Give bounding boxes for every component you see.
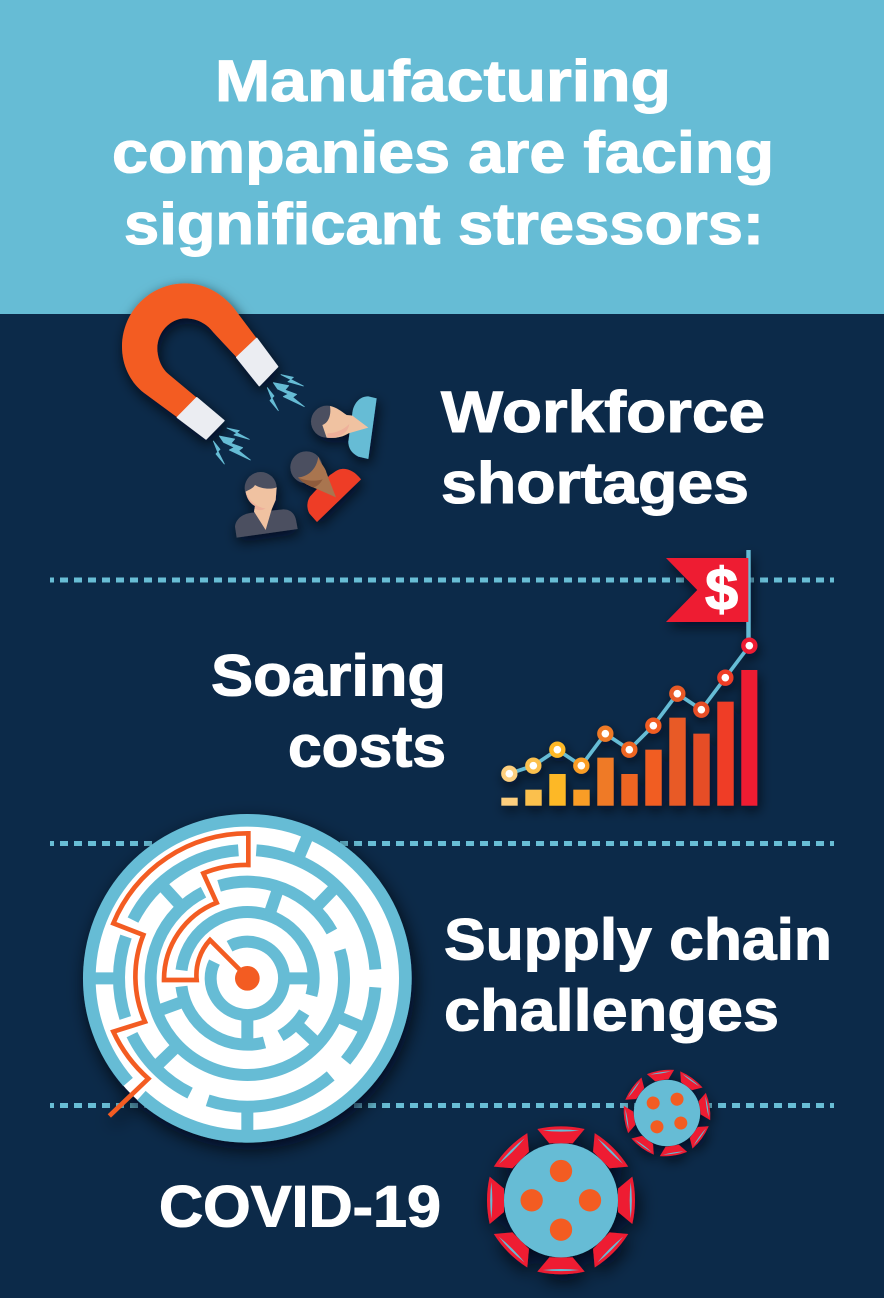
icon: rising cost chart with dollar flag: [501, 550, 757, 806]
maze centre dot: [235, 966, 260, 991]
small virus dots: [634, 1080, 700, 1146]
worker: red shirt: [290, 451, 361, 522]
dotted divider 2: [50, 841, 834, 846]
dollar flag: $: [705, 555, 738, 622]
title: [112, 49, 774, 257]
trend line: [509, 646, 749, 774]
maze disc: [83, 814, 411, 1142]
flag pole: [746, 550, 751, 647]
magnet: [122, 283, 278, 439]
label: workforce shortages: [441, 380, 765, 516]
label: workforce shortages: shortages: [441, 451, 749, 516]
title: Manufacturing: [215, 49, 671, 114]
icon: magnet attracting workers: [122, 283, 377, 538]
lightning bolts upper: [267, 375, 304, 411]
icon: small virus: [607, 1053, 727, 1173]
title: significant stressors:: [124, 192, 764, 257]
title: companies are facing: [112, 120, 774, 186]
header band: [0, 0, 884, 314]
virus spikes: [487, 1126, 635, 1274]
dotted divider 3: [50, 1103, 834, 1108]
worker: grey shirt: [235, 472, 298, 538]
label: workforce shortages: Workforce: [441, 380, 765, 445]
small virus body: [621, 1067, 713, 1159]
label: soaring costs: costs: [288, 714, 446, 780]
icon: large virus: [487, 1126, 635, 1274]
worker: blue shirt: [311, 396, 377, 459]
label: soaring costs: [211, 644, 446, 780]
label: COVID-19: COVID-19: [159, 1174, 441, 1240]
maze spokes: [89, 833, 365, 1136]
maze walls: [24, 755, 470, 1201]
data points: [503, 640, 755, 780]
label: supply chain challenges: [444, 908, 832, 1044]
icon: circular maze: [24, 755, 470, 1201]
dollar flag: [666, 555, 748, 622]
virus dots: [520, 1160, 601, 1241]
label: supply chain challenges: Supply chain: [444, 908, 832, 972]
dotted divider 1: [50, 578, 834, 582]
virus body: [504, 1143, 618, 1257]
label: supply chain challenges: challenges: [444, 978, 779, 1044]
lightning bolts lower: [213, 428, 250, 464]
orange solution path: [109, 833, 248, 1116]
small virus spikes: [607, 1053, 727, 1173]
label: soaring costs: Soaring: [211, 644, 446, 708]
bars: [501, 670, 757, 806]
